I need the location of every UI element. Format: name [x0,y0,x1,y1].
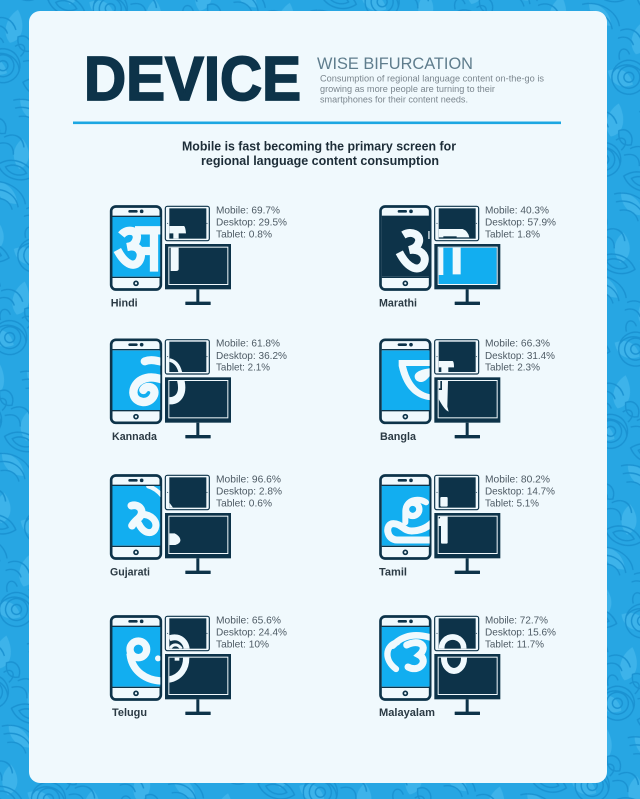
Gujarati label: Gujarati [110,567,150,579]
Malayalam statistics: Mobile: 72.7% [485,614,548,626]
Tamil statistics [485,473,555,509]
Gujarati statistics: Desktop: 2.8% [216,486,282,498]
header divider [73,122,561,124]
icon: Kannada devices [111,340,231,438]
Bangla statistics: Desktop: 31.4% [485,350,555,362]
Kannada label: Kannada [112,431,158,443]
icon: Marathi devices [380,206,500,305]
Hindi statistics [216,204,287,240]
Bangla statistics: Mobile: 66.3% [485,338,550,350]
Gujarati statistics: Tablet: 0.6% [216,497,272,509]
Kannada statistics: Tablet: 2.1% [216,362,270,374]
Tamil label: Tamil [379,567,407,579]
subtitle: wise bifurcation: WISE BIFURCATION [317,54,473,73]
Bangla statistics: Tablet: 2.3% [485,362,540,374]
icon: Gujarati devices [111,475,231,574]
Hindi label: Hindi [111,298,138,310]
panel: Telugu [111,614,287,719]
title: DEVICE: DEVICE [84,45,301,114]
panel: Hindi [111,204,287,310]
subheading [182,140,456,168]
Telugu statistics: Tablet: 10% [216,638,269,650]
Malayalam statistics: Desktop: 15.6% [485,627,556,639]
Hindi statistics: Desktop: 29.5% [216,217,287,229]
intro text block: smartphones for their content needs. [320,94,468,104]
Hindi statistics: Tablet: 0.8% [216,228,272,240]
Bangla statistics [485,338,555,374]
subheading: regional language content consumption [201,154,439,168]
icon: Bangla devices [380,340,500,438]
Tamil statistics: Mobile: 80.2% [485,473,550,485]
panel: Gujarati [110,473,282,579]
panel: Bangla [380,338,555,443]
Telugu label: Telugu [112,707,147,719]
Malayalam statistics [485,614,556,650]
Malayalam label: Malayalam [379,707,435,719]
Marathi statistics: Tablet: 1.8% [485,228,540,240]
Gujarati statistics: Mobile: 96.6% [216,473,281,485]
Hindi statistics: Mobile: 69.7% [216,204,280,216]
icon: Hindi devices [111,206,231,305]
panel: Tamil [379,473,555,579]
Malayalam statistics: Tablet: 11.7% [485,638,544,650]
panel: Kannada [111,338,287,443]
Marathi statistics: Desktop: 57.9% [485,217,556,229]
subheading: Mobile is fast becoming the primary screen for [182,140,456,154]
Kannada statistics: Desktop: 36.2% [216,350,287,362]
Marathi statistics [485,204,556,240]
icon: Tamil devices [380,475,500,574]
Telugu statistics: Mobile: 65.6% [216,614,281,626]
icon: Telugu devices [111,616,231,715]
intro text block: growing as more people are turning to their [320,84,495,94]
Tamil statistics: Desktop: 14.7% [485,486,555,498]
Telugu statistics: Desktop: 24.4% [216,627,287,639]
intro text block [320,74,545,104]
Kannada statistics [216,338,287,374]
Marathi statistics: Mobile: 40.3% [485,204,549,216]
icon: Malayalam devices [380,616,500,715]
Telugu statistics [216,614,287,650]
intro text block: Consumption of regional language content on-the-go is [320,74,545,84]
Marathi label: Marathi [379,298,417,310]
Kannada statistics: Mobile: 61.8% [216,338,280,350]
panel: Malayalam [379,614,556,719]
Bangla label: Bangla [380,431,417,443]
Tamil statistics: Tablet: 5.1% [485,497,539,509]
panel: Marathi [379,204,556,310]
Gujarati statistics [216,473,282,509]
